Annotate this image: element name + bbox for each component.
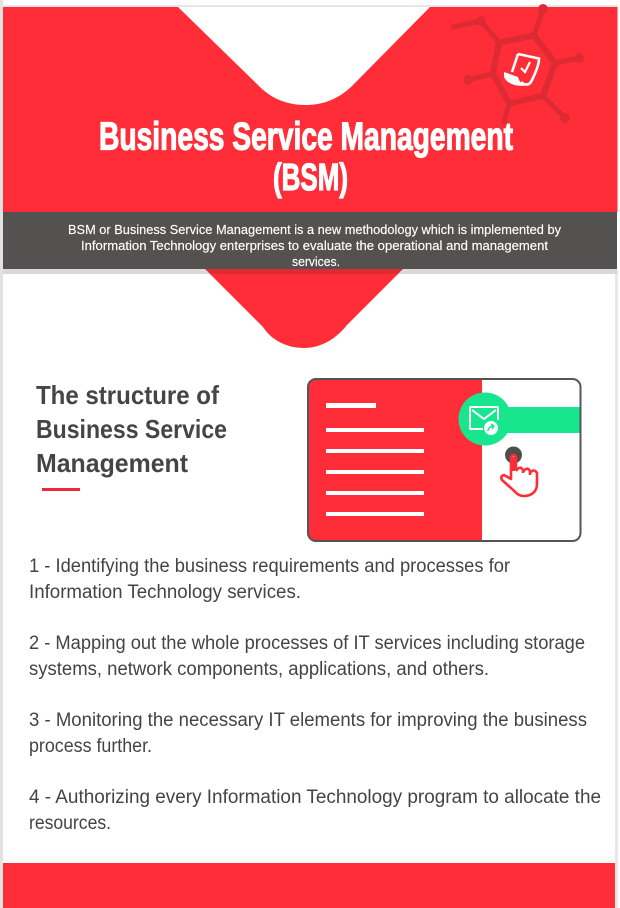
step 2: systems, network components, applications, and others.	[29, 659, 489, 680]
step 2: 2 - Mapping out the whole processes of IT services including storage	[29, 633, 585, 654]
step 4: resources.	[29, 813, 111, 834]
title: (BSM)	[273, 157, 348, 199]
illustration: email screen	[308, 379, 580, 541]
step 2	[29, 633, 585, 680]
list: structure steps	[29, 556, 601, 834]
step 4	[29, 787, 601, 834]
icon: envelope badge	[458, 392, 512, 446]
title	[99, 116, 513, 199]
intro text: Information Technology enterprises to evaluate the operational and management	[81, 238, 548, 253]
heading: The structure of	[36, 380, 219, 410]
step 3	[29, 710, 587, 757]
red downward tab	[205, 269, 403, 348]
footer bar	[3, 863, 615, 908]
icon: pointing hand	[501, 446, 537, 496]
step 3: process further.	[29, 736, 152, 757]
step 1: Information Technology services.	[29, 582, 301, 603]
step 3: 3 - Monitoring the necessary IT elements for improving the business	[29, 710, 587, 731]
intro text: BSM or Business Service Management is a new methodology which is implemented by	[68, 222, 561, 237]
icon: hexagon network	[453, 4, 584, 123]
step 1: 1 - Identifying the business requirements and processes for	[29, 556, 511, 577]
panel: red header	[3, 4, 618, 212]
step 1	[29, 556, 511, 603]
heading: Management	[36, 448, 188, 478]
intro text	[68, 222, 561, 269]
heading	[36, 380, 227, 491]
text lines	[326, 403, 424, 516]
panel: intro band	[3, 212, 617, 269]
step 4: 4 - Authorizing every Information Technology program to allocate the	[29, 787, 601, 808]
intro text: services.	[292, 254, 340, 269]
icon: document with check	[504, 54, 539, 86]
heading: Business Service	[36, 414, 227, 444]
white notch	[178, 7, 430, 105]
